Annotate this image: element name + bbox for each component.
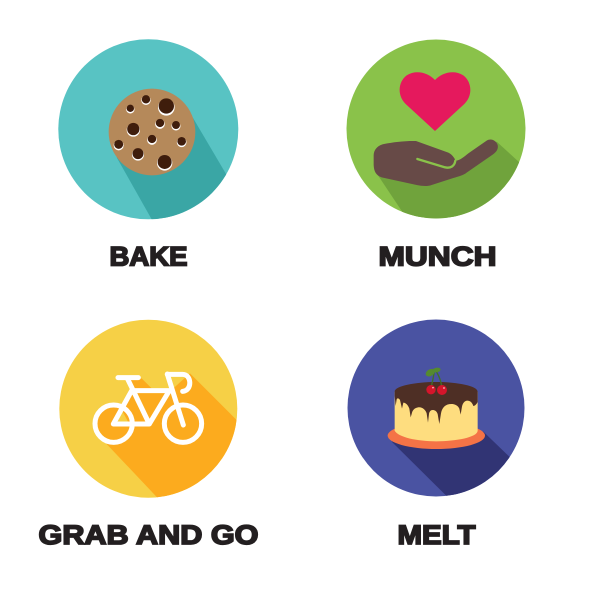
- panel: melt: [348, 320, 527, 550]
- icon: bicycle: [95, 374, 202, 442]
- hand long shadow: [378, 142, 520, 218]
- icon: cookie: [109, 89, 195, 175]
- heading: BAKE: BAKE: [110, 242, 188, 272]
- panel: munch: [346, 40, 526, 267]
- cake long shadow: [392, 432, 510, 496]
- bicycle long shadow: [98, 374, 236, 498]
- panel: grab and go: [38, 320, 258, 550]
- green circle: [346, 40, 526, 218]
- heading: GRAB AND GO: GRAB AND GO: [38, 520, 258, 550]
- icon: hand: [374, 139, 498, 186]
- cookie long shadow: [116, 118, 226, 220]
- indigo circle: [348, 320, 524, 496]
- icon: heart: [400, 72, 470, 131]
- yellow circle: [59, 320, 237, 498]
- heading: MUNCH: MUNCH: [378, 242, 496, 272]
- heading: MELT: MELT: [398, 520, 476, 550]
- yellow gap inside frame: [118, 412, 128, 422]
- teal circle: [58, 39, 238, 219]
- panel: bake: [58, 39, 238, 266]
- icon: cake: [388, 367, 485, 449]
- bicycle frame and wheels: [95, 374, 202, 442]
